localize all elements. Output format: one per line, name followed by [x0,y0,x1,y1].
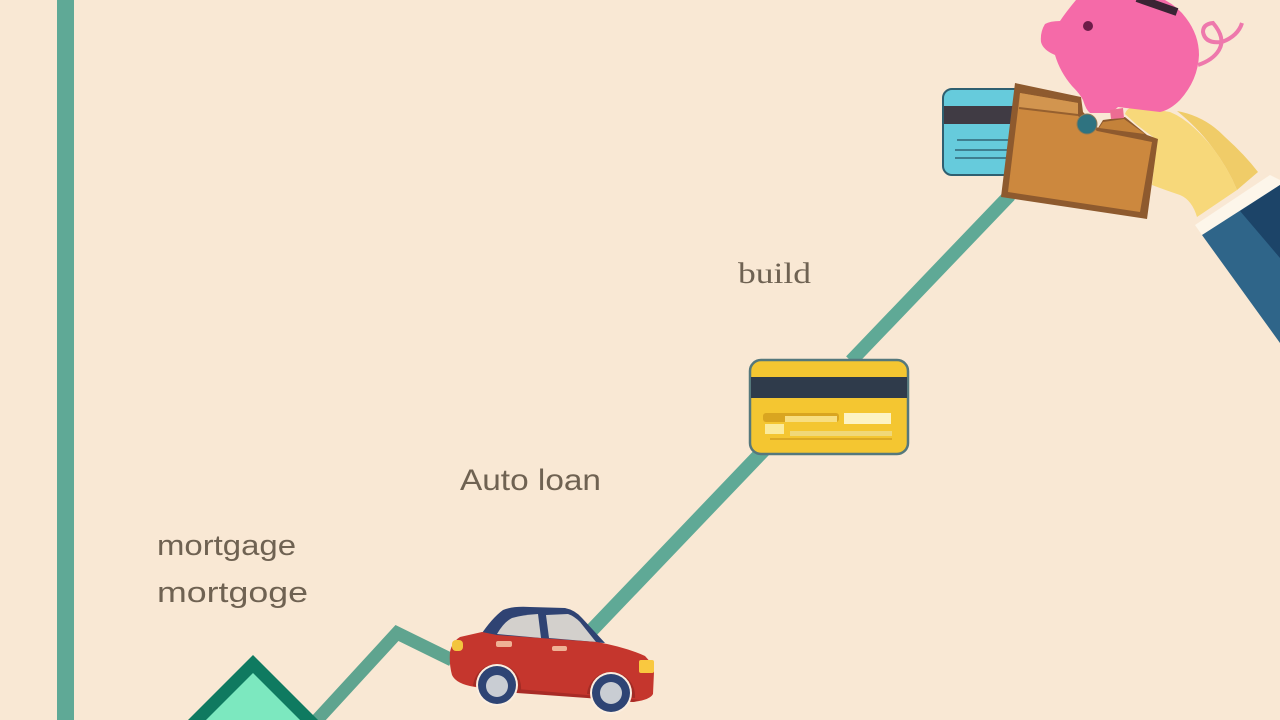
icon: house roof mortgage marker [188,655,318,720]
piggy coin slot [1137,0,1177,12]
wallet clasp [1077,114,1097,134]
icon: brown wallet [1001,83,1158,219]
wheel: front [587,672,635,714]
label: mortgage second line: mortgoge [157,577,308,609]
label: build: build [738,257,811,290]
trend line: start to car [306,633,452,720]
piggy tail [1198,23,1242,65]
vertical axis [57,0,74,720]
label: mortgage: mortgage [157,530,296,562]
icon: yellow credit card [750,360,908,454]
icon: red car [450,607,654,714]
trend line: card to wallet [851,195,1010,361]
wheel: rear [473,664,521,706]
icon: piggy bank [1041,0,1242,119]
icon: hand [1125,107,1258,217]
icon: suit sleeve [1195,175,1280,343]
trend line: car to card [590,449,765,632]
icon: blue credit card [943,89,1033,175]
piggy eye [1083,21,1093,31]
piggy foot [1110,108,1124,119]
label: auto loan: Auto loan [460,464,601,497]
